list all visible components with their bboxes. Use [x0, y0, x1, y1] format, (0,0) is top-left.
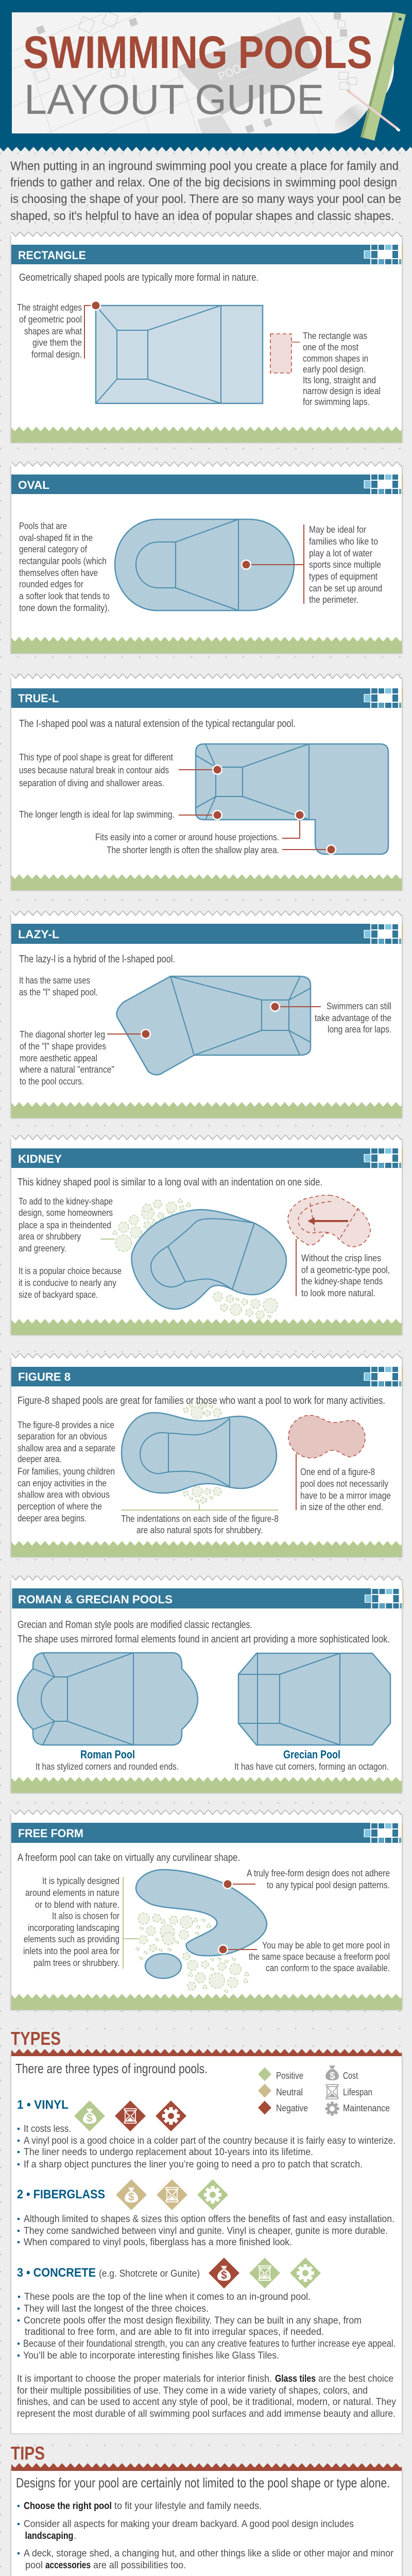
heading: fiberglass: 2 • FIBERGLASS — [17, 2188, 105, 2201]
callout: more pool — [218, 1940, 390, 1973]
fiberglass bullets: Although limited to shapes & sizes this option offers the benefits of fast and easy installation. — [24, 2214, 394, 2225]
caption: grecian pool: Grecian Pool — [283, 1748, 340, 1761]
caption: roman pool: Roman Pool — [80, 1748, 135, 1761]
text: separation: perception of where the — [18, 1501, 102, 1512]
callout: natural look: to look more natural. — [301, 1288, 375, 1298]
callout: lap lane: The rectangle was — [303, 331, 367, 341]
callout: nature: inlets into the pool area for — [23, 1946, 119, 1956]
pencil — [347, 89, 400, 131]
text: same uses: as the "l" shaped pool. — [19, 987, 98, 997]
legend: Cost — [343, 2071, 358, 2081]
heading: tips: TIPS — [11, 2443, 45, 2464]
callout: lap lane: common shapes in — [303, 353, 368, 364]
callout: natural look: the kidney-shape tends — [301, 1276, 383, 1286]
shrubbery — [136, 1913, 249, 1993]
text: oval description: a softer look that tends to — [19, 591, 110, 601]
diagram: free form pool — [136, 1870, 267, 1978]
heading: kidney — [11, 1148, 403, 1168]
text: oval description: general category of — [19, 544, 88, 554]
callout: not a mirror image: in size of the other end. — [300, 1502, 383, 1512]
heading: free form — [11, 1823, 403, 1843]
panel: tips — [10, 2462, 403, 2576]
callout: more pool: You may be able to get more pool in — [262, 1940, 390, 1951]
callout: diagonal leg: of the "l" shape provides — [20, 1041, 106, 1052]
legend: $ — [330, 2071, 335, 2081]
callout: water sports — [241, 524, 382, 605]
callout: water sports: families who like to — [309, 536, 378, 547]
callout: corner fit — [95, 810, 305, 842]
text: spa placement: To add to the kidney-shape — [19, 1196, 113, 1207]
callout: nature: incorporating landscaping — [28, 1923, 119, 1933]
tips list — [18, 2501, 394, 2576]
description: Geometrically shaped pools are typically more formal in nature. — [19, 272, 259, 283]
callout: natural look: of a geometric-type pool, — [301, 1265, 390, 1275]
shrubbery: top — [183, 1401, 221, 1419]
title — [23, 26, 372, 123]
callout: straight edges: give them the — [32, 337, 82, 348]
text: glass tiles: are the best choice — [318, 2374, 393, 2384]
heading: concrete — [17, 2266, 200, 2280]
vinyl bullets: If a sharp object punctures the liner you’re going to need a pro to patch that scratch. — [24, 2159, 363, 2170]
fiberglass bullets: They come sandwiched between vinyl and gunite. Vinyl is cheaper, gunite is more durable. — [24, 2226, 388, 2236]
callout: not a mirror image: have to be a mirror image — [300, 1490, 391, 1501]
callout: more pool: can conform to the space available. — [266, 1963, 390, 1973]
diagram: roman pool — [18, 1653, 198, 1745]
text: spa placement — [19, 1196, 115, 1253]
tips list: . — [74, 2531, 76, 2541]
intro text — [10, 159, 401, 223]
text: separation: shallow area with obvious — [18, 1489, 110, 1500]
caption: roman pool: It has stylized corners and rounded ends. — [36, 1761, 179, 1772]
callout: nature: elements such as providing — [24, 1934, 119, 1944]
callout: not a mirror image: pool does not necessarily — [300, 1479, 388, 1489]
intro: There are three types of inground pools. — [15, 2061, 208, 2076]
text: oval description: Pools that are — [19, 521, 67, 531]
callout: corner fit: Fits easily into a corner or around house projections. — [95, 832, 279, 842]
panel: free form — [10, 1810, 403, 2010]
shrubbery: lower — [213, 1292, 278, 1319]
concrete bullets: traditional to free form, and are able to fit into irregular spaces, if needed. — [25, 2327, 324, 2337]
heading: kidney: KIDNEY — [18, 1153, 62, 1165]
header banner — [0, 0, 412, 151]
caption: roman pool — [36, 1748, 179, 1772]
pool label on blueprint: POOL — [216, 59, 249, 83]
callout: no typical pattern: to any typical pool design patterns. — [267, 1880, 390, 1890]
callout: straight edges — [17, 300, 101, 360]
diagram: uneven figure 8 outline — [288, 1415, 365, 1458]
heading: rectangle — [11, 245, 403, 264]
callout: lap lane — [270, 331, 381, 407]
concrete ratings — [209, 2258, 321, 2289]
text: popular choice: It is a popular choice because — [19, 1266, 122, 1276]
callout: water sports: play a lot of water — [309, 548, 372, 558]
heading: roman and grecian — [12, 1588, 404, 1608]
caption: grecian pool: It has have cut corners, forming an octagon. — [234, 1761, 389, 1772]
shrubbery: bottom — [183, 1486, 221, 1503]
text: separation: deeper area begins. — [18, 1513, 87, 1523]
heading: concrete: (e.g. Shotcrete or Gunite) — [99, 2268, 200, 2279]
text: separation: The figure-8 provides a nice — [18, 1420, 114, 1430]
heading: oval: OVAL — [18, 479, 49, 492]
tips list: Choose the right pool — [24, 2501, 112, 2512]
callout: water sports: types of equipment — [309, 571, 377, 582]
callout: laps — [270, 1001, 391, 1035]
heading: true-L — [11, 688, 403, 708]
panel: lazy-L — [10, 911, 403, 1118]
panel: rectangle — [10, 232, 403, 443]
heading: rectangle: RECTANGLE — [18, 249, 86, 262]
text: separation: separation for an obvious — [18, 1431, 107, 1442]
vinyl ratings: $ — [87, 2112, 93, 2124]
callout: water sports: May be ideal for — [309, 524, 366, 535]
callout: break in contour: This type of pool shape is great for different — [19, 752, 173, 762]
callout: shallow play: The shorter length is often the shallow play area. — [107, 845, 279, 855]
text: separation — [18, 1420, 115, 1523]
vinyl bullets: It costs less. — [24, 2124, 71, 2134]
diagram: kidney pool — [132, 1210, 286, 1309]
heading: types: TYPES — [11, 2028, 61, 2049]
callout: not a mirror image: One end of a figure-8 — [300, 1467, 375, 1477]
text: popular choice: it is conducive to nearly any — [19, 1278, 116, 1288]
fiberglass ratings: $ — [128, 2191, 134, 2203]
text: glass tiles: It is important to choose the proper materials for interior finish. — [17, 2374, 272, 2384]
description — [18, 1619, 390, 1645]
panel: types — [10, 2048, 403, 2434]
legend: Neutral — [276, 2087, 303, 2097]
panel: kidney — [10, 1135, 403, 1335]
tips list: Consider all aspects for making your dream backyard. A good pool design includes — [24, 2519, 354, 2530]
callout: diagonal leg: The diagonal shorter leg — [20, 1029, 105, 1040]
text: glass tiles — [17, 2374, 396, 2419]
tips list: to fit your lifestyle and family needs. — [114, 2501, 262, 2512]
text: oval description — [19, 521, 110, 613]
tips list: pool — [25, 2560, 43, 2571]
callout: water sports: the perimeter. — [309, 595, 358, 605]
fiberglass ratings — [116, 2179, 228, 2210]
callout: not a mirror image — [296, 1454, 391, 1512]
legend: Negative — [276, 2103, 308, 2113]
heading: roman and grecian: ROMAN & GRECIAN POOLS — [18, 1593, 173, 1606]
heading: figure 8: FIGURE 8 — [18, 1370, 71, 1383]
callout: straight edges: The straight edges — [17, 302, 82, 313]
callout: nature — [23, 1876, 138, 1969]
description: The I-shaped pool was a natural extension of the typical rectangular pool. — [19, 718, 296, 730]
heading: lazy-L — [11, 924, 403, 944]
callout: more pool: the same space because a freeform pool — [249, 1952, 390, 1962]
panel: oval — [10, 462, 403, 654]
concrete bullets: These pools are the top of the line when it comes to an in-ground pool. — [24, 2292, 311, 2302]
caption: grecian pool — [234, 1748, 389, 1772]
text: oval description: oval-shaped fit in the — [19, 533, 93, 543]
title: LAYOUT GUIDE — [24, 76, 324, 123]
callout: straight edges: of geometric pool — [19, 314, 82, 325]
text: spa placement: design, some homeowners — [19, 1208, 113, 1218]
callout: water sports: sports since multiple — [309, 560, 381, 570]
text: same uses — [19, 975, 98, 997]
callout: lap lane: for swimming laps. — [303, 397, 370, 407]
concrete bullets — [18, 2292, 396, 2361]
callout: nature: or to blend with nature. — [35, 1900, 119, 1910]
shrubbery: upper left — [113, 1199, 191, 1251]
text: spa placement: place a spa in theindented — [19, 1220, 111, 1230]
callout: break in contour: uses because natural break in contour aids — [19, 765, 169, 775]
vinyl bullets — [18, 2124, 396, 2170]
callout: nature: palm trees or shrubbery. — [33, 1958, 119, 1968]
text: popular choice — [19, 1266, 122, 1300]
panel: true-L — [10, 674, 403, 891]
text: separation: For families, young children — [18, 1466, 115, 1477]
callout: indentations: are also natural spots for shrubbery. — [136, 1525, 263, 1535]
callout: laps: take advantage of the — [315, 1013, 391, 1023]
callout: nature: It also is chosen for — [52, 1911, 119, 1921]
diagram: figure 8 pool — [122, 1413, 277, 1493]
callout: indentations: The indentations on each side of the figure-8 — [121, 1514, 279, 1524]
tips list: A deck, storage shed, a changing hut, and other things like a slide or other major and minor — [24, 2548, 394, 2559]
text: separation: shallow area and a separate — [18, 1443, 115, 1453]
callout: natural look: Without the crisp lines — [301, 1253, 381, 1263]
callout: diagonal leg: where a natural "entrance" — [19, 1064, 114, 1075]
callout: diagonal leg — [19, 1029, 151, 1087]
fiberglass bullets — [18, 2214, 394, 2248]
text: oval description: tone down the formality). — [19, 603, 110, 613]
callout: straight edges: shapes are what — [24, 326, 82, 336]
description: This kidney shaped pool is similar to a long oval with an indentation on one side. — [18, 1177, 322, 1188]
heading: vinyl: 1 • VINYL — [17, 2098, 68, 2112]
callout: diagonal leg: to the pool occurs. — [20, 1076, 84, 1087]
text: oval description: rectangular pools (which — [19, 556, 107, 566]
legend: Positive — [276, 2071, 303, 2081]
tips list: are all possibilities too. — [93, 2560, 186, 2571]
vinyl bullets: The liner needs to undergo replacement about 10-years into its lifetime. — [24, 2147, 313, 2158]
panel: roman and grecian — [10, 1575, 404, 1793]
heading: figure 8 — [11, 1367, 403, 1386]
callout: break in contour — [19, 752, 222, 788]
diagram: grecian pool — [238, 1653, 390, 1745]
legend: Maintenance — [343, 2103, 390, 2113]
legend — [258, 2065, 390, 2116]
text: separation: deeper area. — [18, 1454, 62, 1464]
panel: figure 8 — [10, 1353, 403, 1557]
diagram: lazy-L pool — [116, 976, 311, 1075]
text: spa placement: and greenery. — [19, 1243, 66, 1253]
callout: indentations — [121, 1504, 279, 1535]
callout: laps: Swimmers can still — [327, 1001, 391, 1011]
vinyl ratings — [74, 2100, 186, 2131]
callout: lap lane: early pool design. — [303, 364, 366, 375]
diagram: true-L pool — [196, 744, 388, 854]
callout: laps: long area for laps. — [328, 1024, 391, 1035]
callout: straight edges: formal design. — [31, 349, 82, 360]
text: separation: can enjoy activities in the — [18, 1478, 107, 1488]
legend: Lifespan — [343, 2087, 372, 2097]
diagram: oval pool — [115, 519, 294, 611]
heading: concrete: 3 • CONCRETE — [17, 2266, 96, 2280]
callout: no typical pattern — [222, 1868, 390, 1890]
text: popular choice: size of backyard space. — [19, 1290, 98, 1300]
text: glass tiles: for their multiple possibilities of use. They come in a wide variety of shapes, colors, and — [17, 2385, 368, 2396]
callout: lap lane: Its long, straight and — [303, 375, 376, 385]
text: same uses: It has the same uses — [19, 975, 90, 986]
heading: free form: FREE FORM — [18, 1827, 83, 1840]
concrete ratings: $ — [221, 2269, 227, 2281]
callout: lap swimming: The longer length is ideal for lap swimming. — [19, 809, 175, 820]
callout: water sports: can be set up around — [309, 583, 382, 594]
tips list: accessories — [45, 2560, 91, 2571]
callout: natural look — [296, 1239, 390, 1298]
text: glass tiles: Glass tiles — [275, 2374, 316, 2384]
description: Grecian and Roman style pools are modified classic rectangles. — [18, 1619, 252, 1631]
callout: diagonal leg: more aesthetic appeal — [20, 1053, 97, 1063]
heading: lazy-L: LAZY-L — [18, 928, 59, 941]
heading: oval — [11, 474, 403, 494]
heading: true-L: TRUE-L — [18, 692, 59, 705]
blueprint paper — [12, 11, 394, 133]
callout: no typical pattern: A truly free-form design does not adhere — [247, 1868, 390, 1878]
text: spa placement: area or shrubbery — [19, 1231, 81, 1242]
text: oval description: themselves often have — [19, 568, 98, 578]
description: The lazy-l is a hybrid of the l-shaped pool. — [19, 954, 175, 965]
diagram: rectangle pool — [96, 306, 263, 403]
tips list: landscaping — [25, 2531, 73, 2541]
callout: nature: It is typically designed — [42, 1876, 119, 1886]
callout: break in contour: separation of diving and shallower areas. — [19, 778, 164, 788]
callout: nature: around elements in nature — [25, 1888, 119, 1898]
diagram: kidney outline with arrow — [288, 1195, 370, 1247]
description: A freeform pool can take on virtually any curvilinear shape. — [18, 1852, 240, 1863]
text: oval description: rounded edges for — [19, 579, 83, 589]
concrete bullets: They will last the longest of the three choices. — [24, 2303, 209, 2314]
ruler — [360, 12, 406, 141]
callout: lap lane: narrow design is ideal — [303, 386, 381, 396]
concrete bullets: You’ll be able to incorporate interesting finishes like Glass Tiles. — [23, 2350, 279, 2361]
concrete bullets: Concrete pools offer the most design flexibility. They can be built in any shape, from — [24, 2315, 362, 2326]
fiberglass bullets: When compared to vinyl pools, fiberglass has a more finished look. — [24, 2237, 292, 2248]
callout: lap lane: one of the most — [303, 342, 358, 352]
